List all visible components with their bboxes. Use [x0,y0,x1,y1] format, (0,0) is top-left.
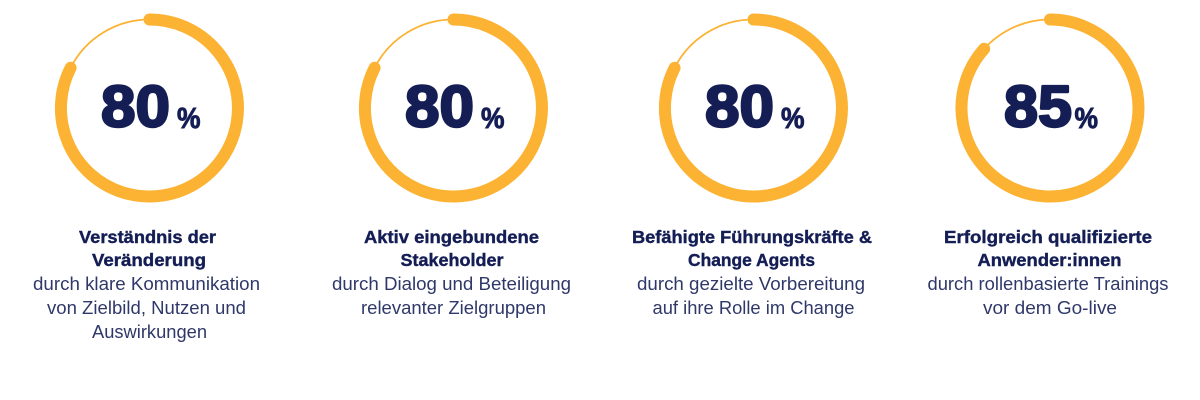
heading: Erfolgreich qualifizierte Anwender:innen: Erfolgreich qualifizierte [944,227,1152,247]
panel: Erfolgreich qualifizierte Anwender:innen [928,19,1168,318]
panel: Verständnis der Veränderung [33,19,260,342]
description: Trainings: durch rollenbasierte Trainings [928,274,1168,294]
heading: Verständnis der Veränderung: Verständnis der [79,227,216,247]
value: 85% [1004,74,1098,140]
description: Dialog und Beteiligung: durch Dialog und Beteiligung [332,274,571,294]
ring chart: 80 percent [665,19,842,197]
heading: Befähigte Führungskräfte & Change Agents [632,227,872,270]
value: 80% [705,74,805,140]
ring chart: 80 percent [61,19,238,196]
heading: Aktiv eingebundene Stakeholder: Stakeholder [400,250,504,270]
value: 80%: 80 [101,74,170,140]
description: Trainings: vor dem Go-live [983,298,1117,318]
heading: Erfolgreich qualifizierte Anwender:innen: Anwender:innen [978,250,1122,270]
heading: Befähigte Führungskräfte & Change Agents: Befähigte Führungskräfte & [632,227,872,247]
description: Kommunikation: durch klare Kommunikation [33,274,260,294]
heading: Aktiv eingebundene Stakeholder [364,227,539,270]
heading: Befähigte Führungskräfte & Change Agents: Change Agents [688,250,815,270]
value: 80%: % [177,103,201,135]
value: 80%: 80 [405,74,474,140]
description: Dialog und Beteiligung: relevanter Zielgruppen [361,298,546,318]
value: 80%: % [781,103,805,135]
value: 80%: 80 [705,74,774,140]
panel: Befähigte Führungskräfte & Change Agents [632,19,872,318]
value: 85%: 85 [1004,74,1072,140]
value: 80% [101,74,201,140]
heading: Verständnis der Veränderung [79,227,216,270]
value: 85%: % [1074,103,1098,135]
description: Kommunikation [33,274,260,342]
heading: Erfolgreich qualifizierte Anwender:innen [944,227,1152,270]
ring chart: 85 percent [961,19,1138,197]
description: Vorbereitung: durch gezielte Vorbereitung [637,274,865,294]
heading: Aktiv eingebundene Stakeholder: Aktiv eingebundene [364,227,539,247]
heading: Verständnis der Veränderung: Veränderung [92,250,206,270]
panel: Aktiv eingebundene Stakeholder [332,19,571,318]
value: 80% [405,74,505,140]
description: Trainings [928,274,1168,318]
description: Vorbereitung [637,274,865,318]
description: Kommunikation: Auswirkungen [92,322,207,342]
description: Dialog und Beteiligung [332,274,571,318]
ring chart: 80 percent [365,19,542,196]
description: Kommunikation: von Zielbild, Nutzen und [47,298,246,318]
description: Vorbereitung: auf ihre Rolle im Change [652,298,854,318]
value: 80%: % [481,103,505,135]
